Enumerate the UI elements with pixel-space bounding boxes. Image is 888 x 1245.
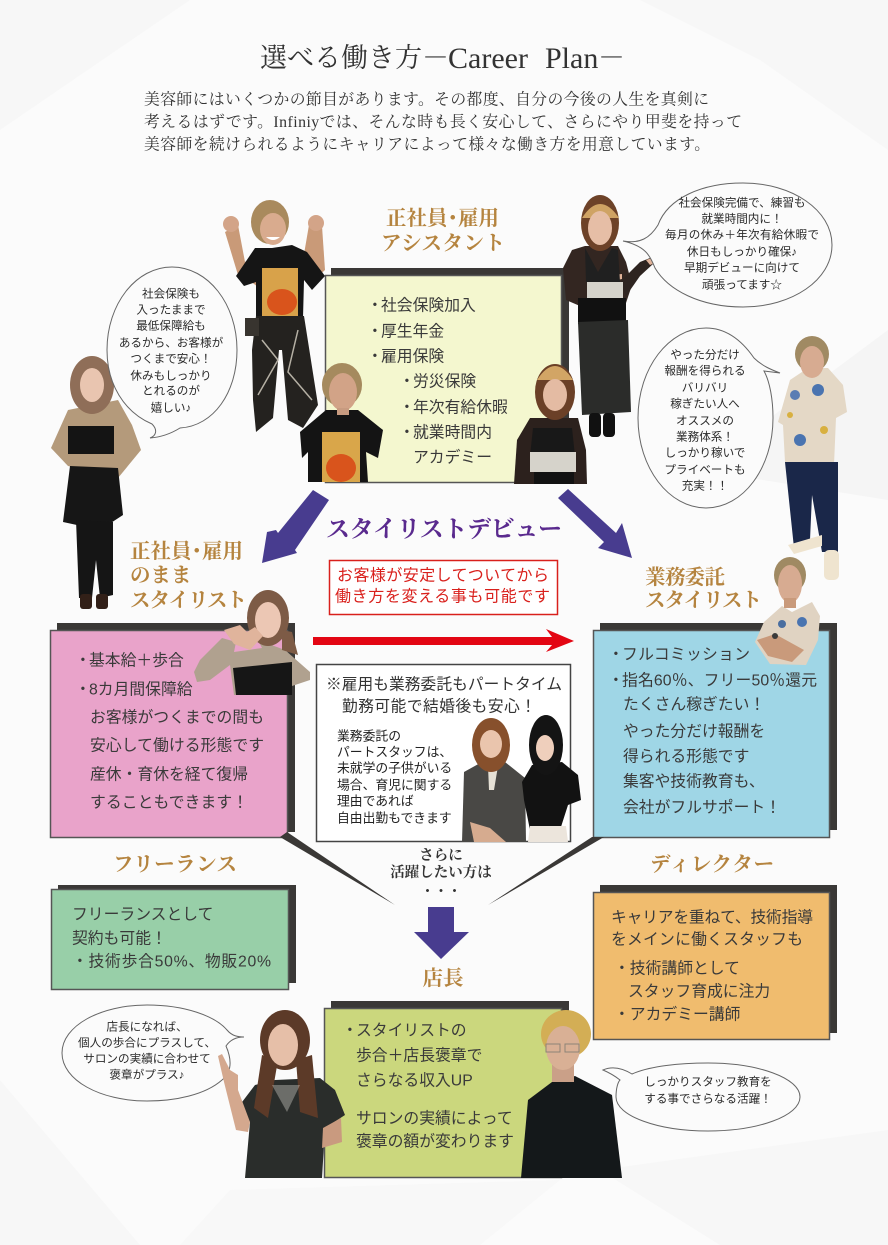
panel: freelance: 契約も可能！ — [72, 930, 167, 948]
speech bubble: employee stylist voice: 最低保障給も — [136, 318, 206, 332]
panel: store manager: サロンの実績によって — [356, 1110, 513, 1128]
panel: assistant: ・ — [367, 348, 383, 366]
speech bubble: store manager woman voice — [62, 1005, 244, 1101]
panel: director: ・技術講師として — [614, 960, 740, 978]
heading: stylist debut: スタイリストデビュー — [326, 517, 562, 543]
panel: part time note: 業務委託の — [337, 728, 401, 744]
callout: change work style — [330, 560, 558, 614]
speech bubble: employee stylist voice: 休みもしっかり — [130, 370, 212, 382]
callout: change work style: 働き方を変える事も可能です — [335, 588, 550, 606]
panel: freelance: ・技術歩合50%、物販20% — [72, 952, 271, 970]
speech bubble: contract voice — [638, 328, 780, 508]
speech bubble: employee stylist voice: とれるのが — [142, 384, 200, 398]
panel: stylist employee: 8カ月間保障給 — [89, 680, 193, 698]
text: want to be more active: 活躍したい方は — [390, 863, 492, 881]
panel: stylist employee: 安心して働ける形態です — [90, 736, 264, 754]
arrow: down — [414, 907, 469, 959]
panel: director — [594, 885, 837, 1040]
panel: part time note: パートスタッフは、 — [337, 744, 452, 760]
panel: director: ・アカデミー講師 — [614, 1004, 741, 1024]
panel: stylist contract: ・ — [608, 672, 624, 690]
panel: stylist contract: たくさん稼ぎたい！ — [623, 696, 765, 714]
panel: store manager: 褒章の額が変わります — [356, 1132, 514, 1150]
heading: stylist contract: スタイリスト — [645, 589, 762, 612]
speech bubble: assistant voice: 早期デビューに向けて — [684, 260, 800, 274]
panel: part time note: ※雇用も業務委託もパートタイム — [326, 676, 562, 694]
photo: woman store manager — [218, 1010, 345, 1178]
arrow: red right — [313, 629, 574, 652]
heading: store manager: 店長 — [422, 967, 464, 990]
speech bubble: contract voice: 業務体系！ — [676, 430, 734, 444]
speech bubble: employee stylist voice: 嬉しい♪ — [151, 400, 191, 414]
panel: stylist contract: 指名60％、フリー50％還元 — [622, 672, 817, 690]
connector: right wedge — [488, 837, 604, 905]
panel: store manager: ・ — [342, 1022, 358, 1040]
panel: stylist contract: 得られる形態です — [623, 748, 749, 766]
intro text: 美容師を続けられるようにキャリアによって様々な働き方を用意しています。 — [144, 136, 710, 154]
speech bubble: contract voice: しっかり稼いで — [665, 446, 745, 460]
title: 選べる働き方－ — [260, 43, 449, 73]
panel: stylist employee: ・ — [75, 682, 91, 698]
panel: stylist employee: ・ — [75, 652, 91, 670]
photo: woman in assistant panel — [514, 364, 587, 484]
panel: part time note — [316, 664, 581, 842]
speech bubble: assistant voice — [623, 183, 832, 307]
speech bubble: employee stylist voice: 社会保険も — [142, 286, 200, 300]
speech bubble: assistant voice: 頑張ってます☆ — [702, 278, 782, 292]
speech bubble: contract voice: やった分だけ — [670, 348, 740, 362]
heading: stylist contract: 業務委託 — [645, 566, 726, 589]
heading: assistant: 正社員・雇用 — [386, 206, 499, 230]
panel: store manager: 歩合＋店長褒章で — [356, 1046, 482, 1064]
panel: stylist employee: お客様がつくまでの間も — [90, 708, 264, 726]
text: want to be more active: さらに — [419, 847, 463, 864]
speech bubble: contract voice: プライベートも — [664, 464, 746, 476]
panel: stylist contract: フルコミッション — [622, 646, 750, 664]
speech bubble: assistant voice: 社会保険完備で、練習も — [678, 196, 806, 210]
panel: assistant — [326, 268, 569, 482]
panel: director: スタッフ育成に注力 — [628, 982, 770, 1000]
panel: assistant: ・ — [399, 400, 415, 416]
panel: stylist contract: 会社がフルサポート！ — [623, 798, 781, 816]
panel: assistant: ・ — [399, 374, 415, 390]
speech bubble: store manager man voice — [603, 1063, 800, 1131]
speech bubble: employee stylist voice: 入ったままで — [136, 304, 206, 316]
photo: man in assistant panel — [300, 363, 383, 482]
speech bubble: contract voice: 報酬を得られる — [664, 364, 746, 378]
speech bubble: employee stylist voice: あるから、お客様が — [119, 336, 224, 350]
panel: assistant: 厚生年金 — [381, 322, 444, 340]
speech bubble: contract voice: バリバリ — [682, 382, 728, 394]
speech bubble: store manager woman voice: サロンの実績に合わせて — [83, 1052, 211, 1066]
speech bubble: contract voice: 充実！！ — [682, 480, 728, 492]
text: want to be more active: ・・・ — [421, 884, 461, 898]
panel: assistant: ・ — [367, 298, 383, 314]
panel: part time note: 自由出勤もできます — [337, 810, 452, 826]
title: － — [598, 43, 625, 73]
connector: left wedge — [280, 832, 395, 905]
panel: assistant: ・ — [367, 324, 383, 340]
panel: freelance — [52, 885, 296, 990]
speech bubble: store manager man voice: する事でさらなる活躍！ — [644, 1092, 772, 1106]
heading: stylist employee: のまま — [130, 565, 192, 587]
heading: assistant — [381, 206, 505, 255]
heading: assistant: アシスタント — [381, 232, 505, 255]
intro text: 考えるはずです。Infiniyでは、そんな時も長く安心して、さらにやり甲斐を持って — [144, 113, 742, 131]
panel: stylist contract: やった分だけ報酬を — [623, 722, 765, 740]
photo: woman standing top right — [563, 195, 666, 437]
panel: store manager: スタイリストの — [356, 1022, 467, 1040]
panel: assistant: 雇用保険 — [381, 348, 444, 366]
panel: assistant: 社会保険加入 — [381, 296, 476, 314]
panel: part time note: 場合、育児に関する — [337, 778, 452, 792]
panel: assistant: 就業時間内 — [413, 424, 492, 442]
speech bubble: store manager man voice: しっかりスタッフ教育を — [644, 1074, 772, 1088]
panel: part time note: 勤務可能で結婚後も安心！ — [342, 698, 536, 716]
speech bubble: assistant voice: 就業時間内に！ — [701, 212, 783, 226]
panel: assistant: 年次有給休暇 — [413, 398, 508, 416]
speech bubble: assistant voice: 休日もしっかり確保♪ — [687, 244, 797, 258]
panel: assistant: アカデミー — [413, 448, 492, 466]
speech bubble: assistant voice: 毎月の休み＋年次有給休暇で — [665, 228, 819, 242]
speech bubble: employee stylist voice: つくまで安心！ — [130, 352, 212, 366]
panel: freelance: フリーランスとして — [72, 906, 213, 924]
photo: man cheering — [223, 200, 325, 432]
title: Career — [448, 42, 528, 74]
speech bubble: contract voice: オススメの — [676, 414, 734, 428]
panel: store manager — [324, 1001, 569, 1178]
panel: stylist contract: ・ — [608, 646, 624, 664]
speech bubble: employee stylist voice — [107, 267, 237, 438]
speech bubble: store manager woman voice: 店長になれば、 — [106, 1020, 188, 1034]
title: Plan — [545, 42, 598, 74]
panel: store manager: さらなる収入UP — [356, 1072, 473, 1090]
heading: stylist employee: スタイリスト — [130, 589, 247, 612]
heading: stylist employee: 正社員・雇用 — [130, 539, 243, 563]
panel: stylist employee: 基本給＋歩合 — [89, 652, 184, 670]
intro text: 美容師にはいくつかの節目があります。その都度、自分の今後の人生を真剣に — [144, 90, 709, 108]
heading: freelance: フリーランス — [113, 854, 237, 876]
speech bubble: contract voice: 稼ぎたい人へ — [670, 396, 740, 410]
callout: change work style: お客様が安定してついてから — [337, 566, 549, 584]
heading: stylist contract — [645, 566, 762, 612]
photo: two part time staff — [462, 715, 581, 842]
photo: woman standing left — [51, 356, 141, 609]
arrow: down right — [558, 489, 632, 558]
panel: stylist employee — [50, 623, 295, 838]
panel: director: キャリアを重ねて、技術指導 — [611, 908, 813, 926]
panel: part time note: 理由であれば — [337, 794, 414, 808]
panel: stylist employee: 産休・育休を経て復帰 — [90, 766, 248, 784]
photo: man standing right — [778, 336, 847, 580]
panel: assistant: 労災保険 — [413, 372, 476, 390]
speech bubble: store manager woman voice: 個人の歩合にプラスして、 — [78, 1036, 216, 1050]
panel: stylist contract — [594, 623, 837, 838]
panel: stylist employee: することもできます！ — [90, 794, 248, 812]
panel: part time note: 未就学の子供がいる — [337, 760, 452, 776]
speech bubble: store manager woman voice: 褒章がプラス♪ — [109, 1068, 185, 1082]
arrow: down left — [262, 490, 329, 563]
heading: director: ディレクター — [650, 853, 774, 876]
text: want to be more active — [390, 847, 492, 898]
panel: assistant: ・ — [399, 424, 415, 442]
heading: stylist employee — [130, 539, 247, 612]
intro text — [144, 90, 742, 154]
panel: stylist contract: 集客や技術教育も、 — [623, 772, 765, 790]
photo: man with crossed arms — [755, 557, 820, 665]
photo: man store manager — [521, 1010, 622, 1178]
panel: director: をメインに働くスタッフも — [611, 930, 803, 948]
photo: woman heart pose — [194, 590, 310, 695]
